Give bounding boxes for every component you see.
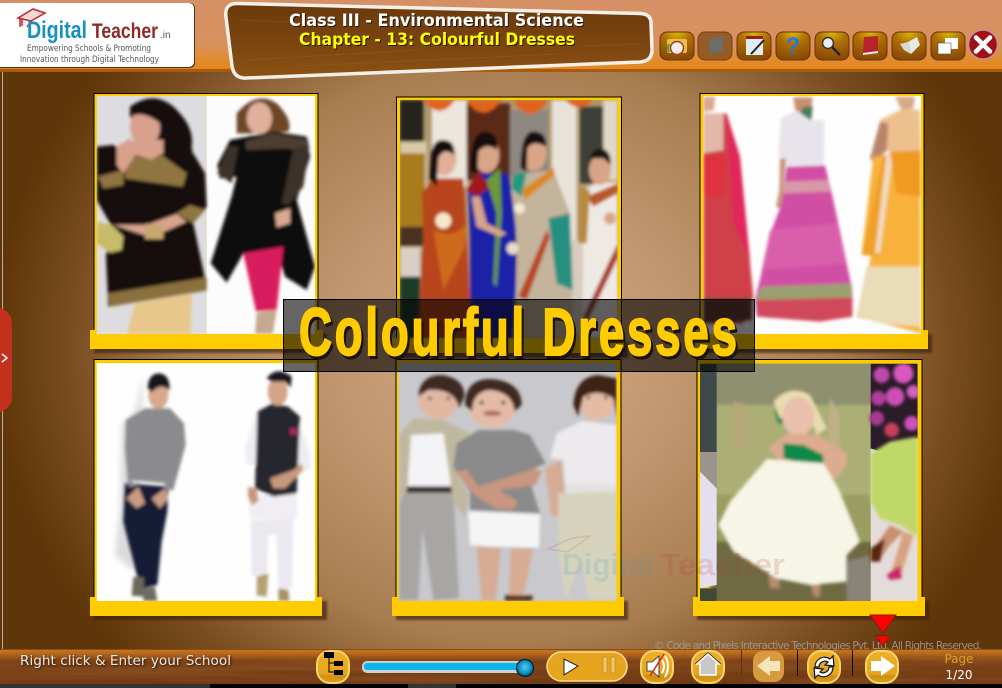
tagline [20,44,159,65]
pointer: red triangles [870,615,896,646]
watermark: Digital [562,547,654,582]
toolbar icons [660,30,998,60]
icon: notepad [737,32,771,60]
play and pause control [547,652,627,681]
photo: three boys [398,363,617,601]
left edge line [2,72,3,650]
footer wood bar [0,649,1002,684]
icon: open book [892,32,926,60]
icon: help [776,32,810,60]
page counter [944,652,974,682]
icon: previous arrow button [753,651,784,682]
icon: close [968,30,998,59]
icon: mute button [641,651,673,683]
tagline: Empowering Schools & Promoting [27,44,151,54]
icon: reference book [698,32,732,60]
icon: window resize [931,32,965,60]
icon: help: ? [786,33,800,60]
tagline: Innovation through Digital Technology [20,55,159,65]
photo: women in sarees [400,100,618,338]
card 4 frame and caption bar [90,360,327,620]
bottom strip [0,684,1002,688]
card 2 frame and caption bar [392,97,628,358]
banner title: Colourful Dresses [299,295,737,370]
divider [852,650,853,676]
copyright notice: © Code and Pixels Interactive Technologies Pvt. Ltd. All Rights Reserved. [654,640,982,652]
page counter: Page [944,652,974,666]
header wood bar [0,0,1002,72]
progress slider [362,660,534,676]
photo: girl in white tutu dress [700,358,920,605]
photo: women in lehengas [703,96,921,334]
photo: women in black kurtis [97,96,315,334]
icon: home button [692,651,724,683]
card 6 frame and caption bar [693,360,929,620]
icon: next arrow button [866,651,898,683]
icon: dictionary [853,32,887,60]
card 3 frame and caption bar [695,94,932,353]
icon: contents tree button [317,651,349,683]
title plaque [226,3,652,78]
side panel tab [0,308,12,412]
divider [797,650,798,676]
card 1 frame and caption bar [90,94,327,353]
page counter: 1/20 [946,668,972,682]
icon: magnifier [815,32,849,60]
brand name: Digital [27,17,87,44]
page title banner [284,295,754,372]
icon: clock folder [660,32,694,60]
title line 2: Chapter - 13: Colourful Dresses [299,30,575,50]
photo: men in casual and ethnic wear [97,363,315,601]
icon: refresh button [808,651,840,683]
logo panel [0,3,195,68]
icon: graduation cap [18,9,45,27]
school prompt text: Right click & Enter your School [20,653,231,669]
card 5 frame and caption bar [392,360,628,620]
slider knob [516,660,534,676]
logo panel: .in [160,30,171,41]
watermark [548,536,785,582]
watermark: Teacher [660,547,785,582]
divider [741,650,742,676]
title line 1: Class III - Environmental Science [289,11,584,31]
logo panel: Teacher [92,20,158,43]
